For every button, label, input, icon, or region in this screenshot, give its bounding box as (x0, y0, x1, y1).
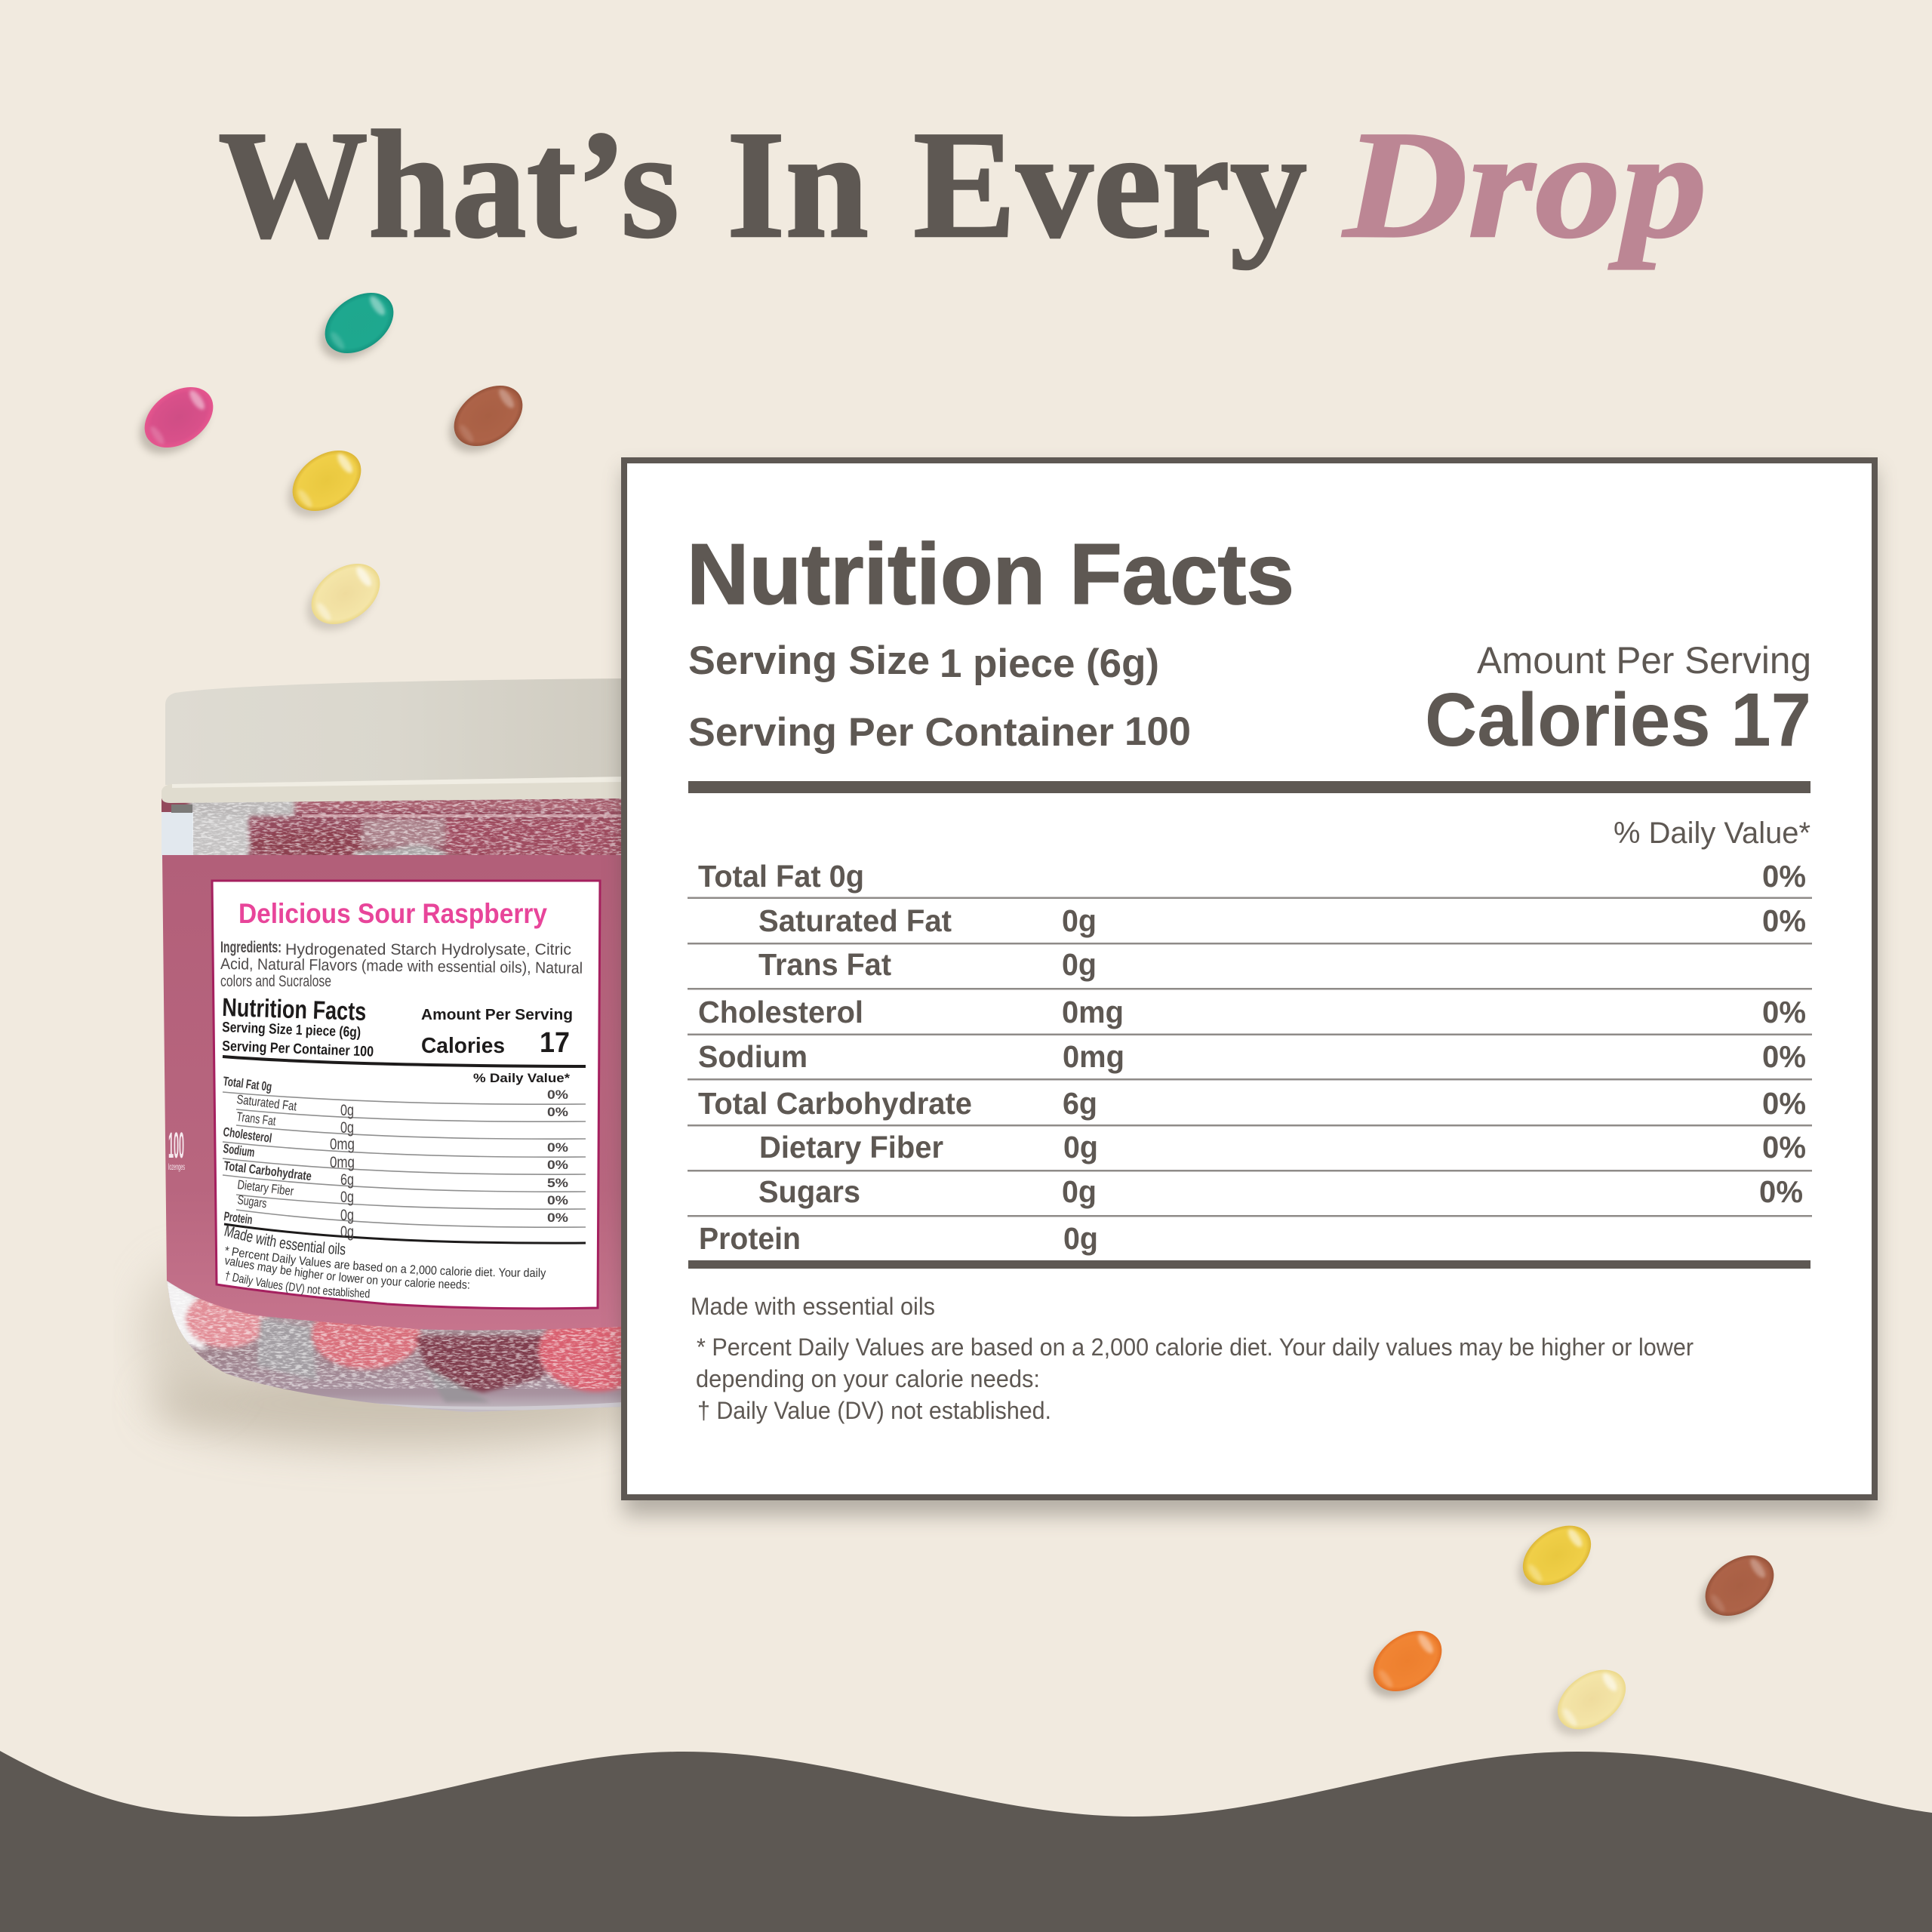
label nutrient rows: Total Carbohydrate (223, 1158, 312, 1183)
label amounts: 0g (340, 1119, 354, 1137)
label daily values: 0% (547, 1193, 568, 1208)
label ingredients (220, 939, 583, 990)
label nutrient rows (222, 1074, 312, 1227)
daily value percentages: 0% (1762, 859, 1806, 894)
title: Drop (1342, 100, 1707, 270)
footnotes (691, 1293, 1694, 1424)
white jar label (211, 880, 601, 1310)
serving information: 1 piece (6g) (940, 641, 1159, 686)
daily value percentages: 0% (1759, 1174, 1803, 1209)
nutrition panel shadow (623, 469, 1876, 1515)
label ingredients: Ingredients: (220, 939, 281, 956)
label amounts: 0mg (330, 1136, 355, 1153)
nutrient names: Sugars (758, 1174, 860, 1209)
product jar: lozenges (168, 1161, 185, 1172)
label amounts: 0mg (330, 1154, 355, 1171)
candy: pale yellow lower (1540, 1657, 1638, 1748)
nutrient amounts: 0g (1062, 903, 1097, 938)
label footnotes: † Daily Values (DV) not established (226, 1271, 370, 1298)
label nutrition header: Calories (421, 1034, 505, 1058)
label amounts: 6g (340, 1171, 354, 1189)
label amounts: 0g (340, 1207, 354, 1224)
label footnotes: * Percent Daily Values are based on a 2,000 calorie diet. Your daily (225, 1247, 546, 1280)
daily value percentages: 0% (1762, 1130, 1806, 1164)
label ingredients: Hydrogenated Starch Hydrolysate, Citric (285, 941, 571, 958)
label nutrition header: Serving Size 1 piece (6g) (222, 1020, 361, 1041)
product jar (132, 678, 621, 1466)
label footnotes: Made with essential oils (224, 1226, 346, 1254)
label nutrient rows: Dietary Fiber (237, 1177, 295, 1198)
nutrient names: Total Fat 0g (698, 859, 864, 894)
candy: brown lower (1687, 1543, 1786, 1635)
label heading: Delicious Sour Raspberry (238, 898, 547, 929)
nutrient names: Cholesterol (698, 995, 863, 1029)
label nutrient rows: Protein (223, 1209, 254, 1227)
label nutrient rows: Total Fat 0g (223, 1074, 272, 1094)
label daily values (547, 1088, 568, 1225)
nutrient names: Saturated Fat (758, 903, 952, 938)
footer rule (688, 1260, 1810, 1269)
serving information: Serving Per Container (688, 710, 1114, 755)
nutrient amounts: 0g (1063, 1130, 1098, 1164)
lozenge count (168, 1126, 185, 1172)
label nutrition header: Nutrition Facts (222, 993, 367, 1026)
candy: teal (307, 280, 406, 372)
nutrient amounts (1062, 903, 1124, 1256)
title: In (727, 100, 869, 270)
label nutrition header: Serving Per Container 100 (222, 1038, 374, 1060)
nutrient amounts: 0g (1062, 1174, 1097, 1209)
jar upper glass with wrapped candies (162, 797, 623, 862)
title: What’s (218, 100, 679, 270)
nutrient names: Protein (699, 1221, 801, 1256)
bottom wave band (0, 1751, 1932, 1932)
daily value percentages (1759, 859, 1806, 1209)
label daily values: 5% (547, 1176, 568, 1190)
footnotes: * Percent Daily Values are based on a 2,000 calorie diet. Your daily values may be higher or lower (697, 1334, 1694, 1361)
product jar: 100 (168, 1126, 184, 1166)
nutrient amounts: 0g (1063, 1221, 1098, 1256)
header rule (688, 781, 1810, 793)
footnotes: Made with essential oils (691, 1293, 935, 1320)
label nutrition header: Amount Per Serving (421, 1007, 573, 1023)
label amounts: 0g (340, 1223, 354, 1241)
label daily values: 0% (547, 1088, 568, 1102)
label ingredients: Acid, Natural Flavors (made with essential oils), Natural (220, 955, 583, 977)
label nutrient rows: Sugars (236, 1192, 268, 1211)
label nutrient rows: Sodium (222, 1141, 256, 1160)
jar lid (165, 678, 623, 785)
title: Every (913, 100, 1307, 270)
jar shadow (142, 1264, 649, 1447)
label amounts (330, 1102, 355, 1241)
label amounts: 0g (340, 1102, 354, 1119)
daily value percentages: 0% (1762, 1039, 1806, 1074)
candy: orange (1355, 1618, 1454, 1710)
serving information: Serving Size (688, 638, 930, 683)
label amounts: 0g (340, 1189, 354, 1206)
candy: yellow (275, 438, 374, 530)
candy: pale yellow (294, 551, 392, 643)
title (218, 100, 1707, 270)
nutrient names: Sodium (698, 1039, 808, 1074)
label daily values: 0% (547, 1140, 568, 1155)
jar lid ring (162, 777, 623, 803)
nutrient amounts: 0mg (1063, 1039, 1124, 1074)
serving information (688, 638, 1191, 755)
label rules (223, 1092, 586, 1243)
candy: brown (436, 373, 535, 465)
label daily values: 0% (547, 1158, 568, 1172)
label ingredients: colors and Sucralose (220, 973, 331, 990)
label nutrient rows: Cholesterol (222, 1124, 272, 1146)
nutrient names: Total Carbohydrate (698, 1086, 972, 1121)
footnotes: depending on your calorie needs: (696, 1365, 1040, 1392)
label nutrient rows: Trans Fat (236, 1109, 277, 1128)
jar lower glass with wrapped candies (168, 1281, 621, 1412)
label nutrition header (222, 993, 586, 1085)
label nutrient rows: Saturated Fat (236, 1092, 297, 1114)
amount per serving: Amount Per Serving (1477, 639, 1811, 681)
jar label band (162, 855, 623, 1331)
label nutrition header: 17 (540, 1027, 570, 1059)
footnotes: † Daily Value (DV) not established. (697, 1397, 1051, 1424)
nutrient amounts: 6g (1063, 1086, 1097, 1121)
nutrient amounts: 0mg (1062, 995, 1124, 1029)
label footnotes: values may be higher or lower on your calorie needs: (225, 1257, 469, 1289)
calories: Calories 17 (1425, 678, 1811, 762)
nutrient names: Dietary Fiber (759, 1130, 943, 1164)
label daily values: 0% (547, 1211, 568, 1225)
label footnotes (224, 1226, 546, 1298)
nutrient names: Trans Fat (758, 947, 891, 982)
serving information: 100 (1124, 709, 1191, 754)
daily value percentages: 0% (1762, 995, 1806, 1029)
panel heading: Nutrition Facts (687, 527, 1294, 623)
nutrient names (698, 859, 972, 1256)
daily value percentages: 0% (1762, 1086, 1806, 1121)
label daily values: 0% (547, 1105, 568, 1119)
panel: nutrition facts (624, 460, 1875, 1497)
nutrient amounts: 0g (1062, 947, 1097, 982)
daily value percentages: 0% (1762, 903, 1806, 938)
candy: yellow lower (1506, 1513, 1604, 1604)
candy: pink (127, 374, 226, 466)
label nutrition header: % Daily Value* (473, 1071, 570, 1085)
daily value header: % Daily Value* (1614, 817, 1810, 850)
